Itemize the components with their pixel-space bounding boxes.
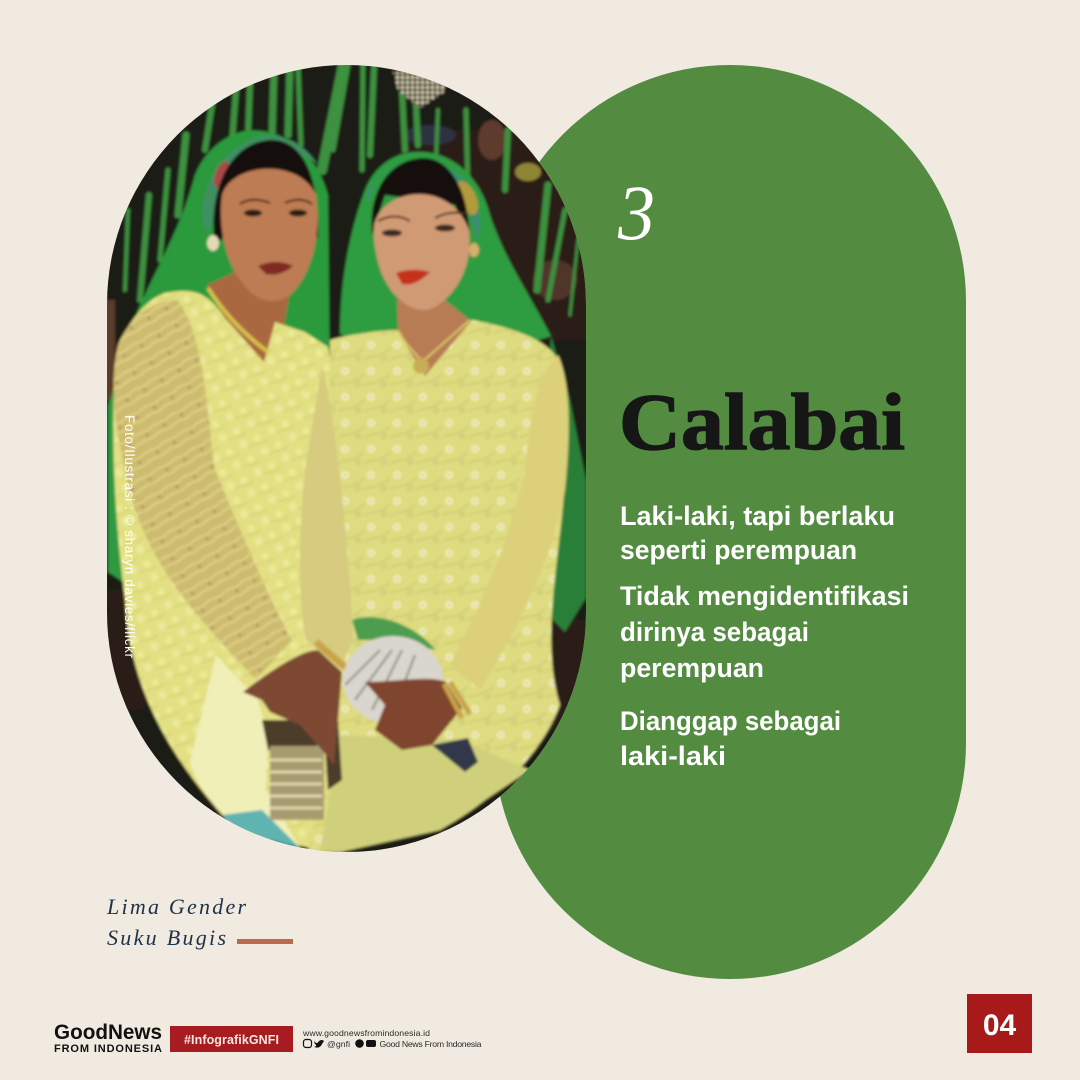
lower right skirt — [320, 735, 530, 852]
right dress necklace — [398, 320, 470, 362]
text block: description: Laki-laki, tapi berlaku — [620, 501, 895, 531]
panel: green stadium — [494, 65, 966, 979]
small gold purse — [270, 746, 324, 820]
left headdress jewel — [212, 160, 232, 190]
photo backdrop — [105, 63, 588, 854]
website and social handles — [302, 1028, 482, 1049]
number 3: 3 — [617, 169, 655, 256]
dark bag strap — [432, 738, 478, 772]
ikat wrap — [190, 655, 300, 848]
inner sleeve — [300, 365, 353, 668]
accent bar — [237, 939, 293, 944]
palm fronds — [125, 65, 578, 315]
left dress — [113, 291, 352, 852]
back veil left — [107, 390, 124, 583]
text block: description: Tidak mengidentifikasi — [620, 581, 909, 611]
hashtag badge: #InfografikGNFI — [184, 1033, 279, 1047]
logo: GoodNews From Indonesia: GoodNews — [54, 1020, 162, 1044]
icon: youtube — [366, 1040, 376, 1047]
website and social handles: www.goodnewsfromindonesia.id — [302, 1028, 430, 1038]
icon: twitter — [314, 1040, 324, 1048]
left hand — [243, 650, 342, 765]
left veil — [135, 128, 332, 352]
right face — [374, 194, 470, 310]
left neck — [207, 270, 290, 362]
left facial features — [207, 200, 312, 275]
right hair — [372, 158, 470, 255]
text block: description: laki-laki — [620, 741, 726, 771]
series title: Lima Gender Suku Bugis: Suku Bugis — [107, 925, 226, 950]
text block: description: dirinya sebagai — [620, 617, 809, 647]
left headdress — [203, 136, 318, 232]
photo credit: Foto/Ilustrasi : © sharyn davies/flickr — [122, 415, 137, 658]
text block: description: Dianggap sebagai — [620, 706, 841, 736]
right veil — [340, 152, 551, 360]
right headdress — [366, 162, 480, 240]
back veil right — [548, 336, 586, 634]
left bangle — [316, 642, 346, 668]
website and social handles: @gnfi — [327, 1039, 350, 1049]
hashtag badge — [170, 1026, 293, 1052]
text block: description: seperti perempuan — [620, 535, 857, 565]
ikat pattern — [222, 810, 300, 848]
page number badge — [967, 994, 1032, 1053]
icon: facebook — [355, 1039, 364, 1048]
right sleeve — [450, 355, 569, 690]
icon: instagram — [304, 1040, 312, 1048]
text block: description: perempuan — [620, 653, 764, 683]
logo: GoodNews From Indonesia — [54, 1020, 162, 1055]
green clutch fold — [352, 617, 436, 650]
series title: Lima Gender Suku Bugis — [106, 894, 246, 950]
heading: Calabai: Calabai — [619, 379, 905, 467]
left hair — [213, 140, 318, 240]
silver clutch — [343, 636, 443, 724]
right dress — [308, 320, 569, 852]
left dress necklace — [208, 288, 268, 352]
right facial features — [378, 213, 479, 284]
page number badge: 04 — [983, 1009, 1016, 1042]
right hand — [365, 679, 462, 750]
dark skirt fold — [262, 720, 342, 790]
left sleeve — [114, 300, 292, 680]
website and social handles: Good News From Indonesia — [380, 1039, 482, 1049]
purse ridges — [270, 760, 322, 808]
beaded ornament — [393, 72, 446, 108]
text block: description — [620, 501, 909, 771]
right neck — [397, 300, 472, 378]
right bangles — [444, 682, 470, 718]
right headdress jewel — [456, 179, 480, 217]
logo: GoodNews From Indonesia: FROM INDONESIA — [54, 1043, 162, 1055]
pendant — [413, 358, 429, 374]
photo: two calabai in yellow kebaya and green veils — [105, 63, 588, 854]
clutch pleats — [345, 650, 415, 715]
left face — [221, 169, 318, 301]
series title: Lima Gender Suku Bugis: Lima Gender — [106, 894, 246, 919]
